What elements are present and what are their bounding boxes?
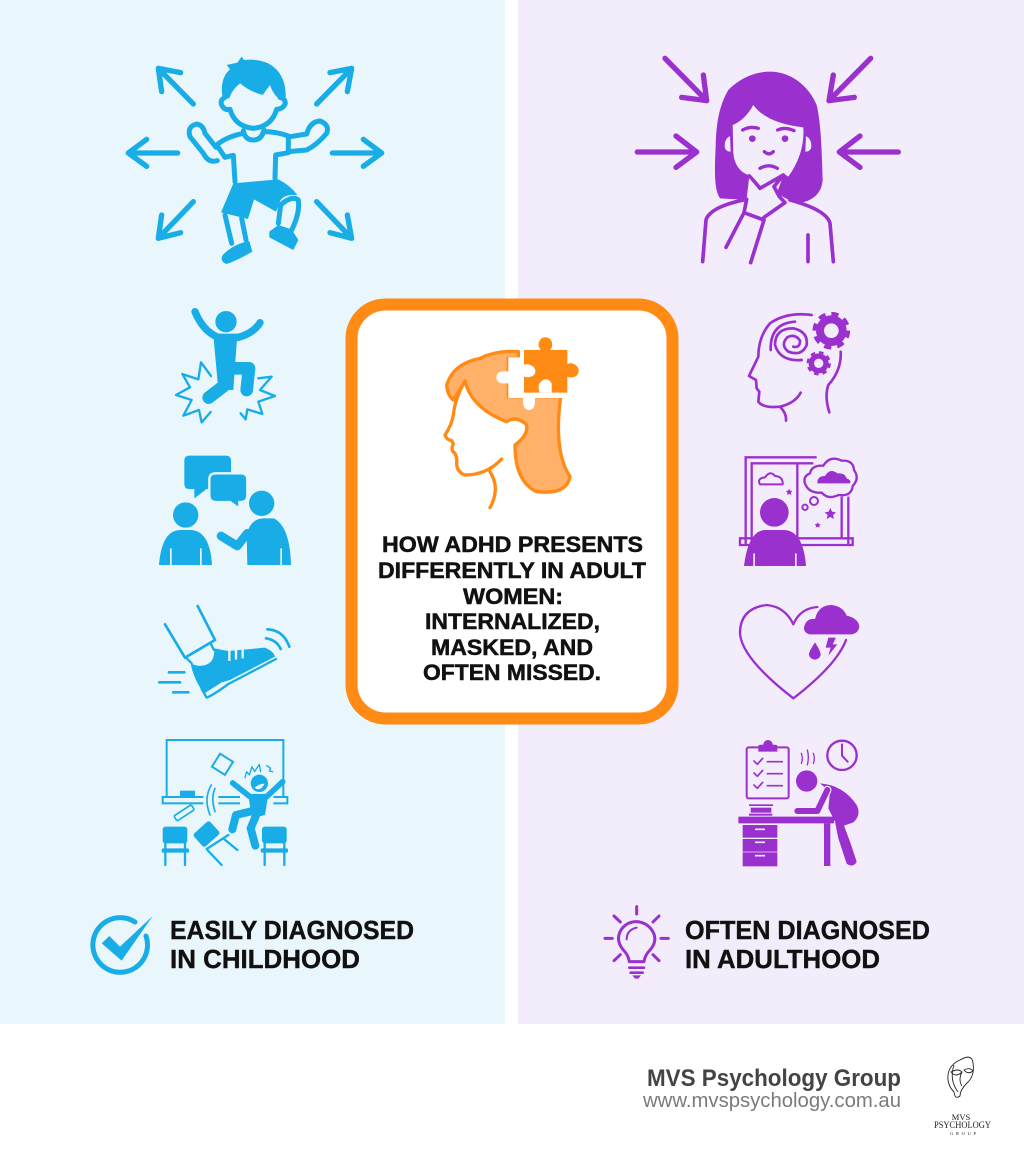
outward arrows	[128, 68, 382, 238]
left person	[159, 502, 212, 565]
person silhouette	[744, 498, 806, 566]
tipped chair	[192, 820, 237, 865]
sound waves	[203, 795, 218, 806]
woman face	[733, 105, 803, 187]
puzzle notch	[539, 379, 552, 393]
tear drop	[809, 642, 821, 660]
title text: DIFFERENTLY IN ADULT	[378, 558, 647, 583]
woman body and hand	[703, 175, 833, 263]
bulb rays	[605, 907, 668, 961]
label: easily diagnosed in childhood: IN CHILDHOOD	[170, 946, 360, 974]
left chair	[162, 827, 189, 865]
trouser leg	[165, 606, 215, 658]
flying paper	[212, 754, 233, 775]
spiral	[771, 322, 807, 360]
window frame	[740, 457, 853, 545]
stars	[786, 489, 836, 528]
icon: person daydreaming at window	[740, 457, 857, 566]
motion lines	[159, 629, 289, 692]
orange puzzle piece	[524, 337, 579, 393]
right person	[221, 491, 291, 565]
label: often diagnosed in adulthood: IN ADULTHOOD	[685, 946, 880, 974]
card frame	[352, 304, 672, 718]
check ring	[93, 918, 148, 972]
woman ears	[725, 136, 811, 152]
flying chalk	[174, 805, 194, 821]
icon: chaotic classroom	[162, 740, 288, 865]
bulb highlight	[627, 928, 637, 939]
jumper legs	[209, 367, 249, 398]
icon: lightbulb	[605, 907, 668, 979]
boy outline	[189, 97, 327, 243]
puzzle gap	[496, 357, 563, 410]
label: easily diagnosed in childhood: EASILY DIAGNOSED	[170, 917, 414, 945]
thought dots	[802, 497, 818, 510]
stress lines	[801, 750, 814, 765]
clipboard	[747, 740, 789, 798]
eraser	[180, 791, 195, 797]
icon: hyperactive boy with outward arrows	[128, 57, 382, 264]
sound wave lines	[207, 785, 215, 815]
jumper head	[215, 311, 237, 332]
large speech bubble	[184, 456, 231, 498]
bulb outline	[618, 922, 655, 962]
face profile	[445, 381, 502, 508]
lightning bolt	[826, 638, 837, 656]
inward arrows	[637, 58, 898, 167]
icon: thoughtful woman with inward arrows	[637, 58, 898, 263]
bulb base	[629, 968, 644, 973]
boy hair	[222, 57, 286, 98]
check tick	[102, 916, 153, 961]
bursts	[176, 362, 275, 422]
jumper arms	[195, 312, 260, 337]
storm cloud	[804, 605, 859, 634]
laces	[229, 648, 243, 661]
icon: head with spiral and gears	[749, 314, 848, 421]
large gear	[814, 314, 848, 348]
right chair	[261, 827, 288, 865]
jumper body	[213, 335, 237, 390]
title text: MASKED, AND	[431, 635, 593, 660]
head outline	[749, 314, 841, 421]
slumped person	[796, 770, 859, 866]
shoe sole	[202, 659, 276, 698]
heart outline	[740, 605, 846, 698]
footer: organisation name: MVS Psychology Group	[647, 1065, 901, 1092]
board tray	[163, 797, 287, 803]
logo wordmark: PSYCHOLOGY	[934, 1120, 991, 1130]
whiteboard	[167, 740, 283, 797]
icon: heart with storm cloud	[740, 605, 859, 698]
bulb tip	[632, 975, 641, 979]
panel: adulthood background	[518, 0, 1024, 1024]
boy shoes	[222, 225, 298, 264]
panicking person	[232, 764, 283, 846]
cloud inside thought	[817, 471, 850, 483]
panel: childhood background	[0, 0, 505, 1024]
logo wordmark: GROUP	[950, 1131, 976, 1136]
thought cloud	[804, 459, 857, 497]
icon: person jumping with bursts	[176, 311, 275, 422]
footer logo	[934, 1057, 995, 1136]
desk	[738, 817, 834, 866]
sock	[186, 644, 214, 663]
title text: HOW ADHD PRESENTS	[382, 532, 643, 557]
panel: central title card	[352, 304, 672, 718]
books	[749, 804, 773, 816]
title text: WOMEN:	[463, 584, 563, 609]
icon: check mark in circle	[93, 916, 153, 972]
title text: OFTEN MISSED.	[423, 660, 601, 685]
logo wordmark: MVS	[952, 1112, 970, 1122]
small cloud	[759, 473, 783, 484]
icon: exhausted person at desk	[738, 740, 859, 866]
label: often diagnosed in adulthood: OFTEN DIAGNOSED	[685, 917, 930, 945]
logo line face	[948, 1057, 973, 1097]
icon: kicking foot	[159, 606, 289, 698]
icon: head with puzzle piece	[445, 337, 579, 508]
woman facial features	[743, 127, 794, 168]
woman hair	[715, 72, 823, 203]
shoe	[191, 648, 275, 694]
boy shorts	[221, 179, 297, 219]
title text: INTERNALIZED,	[425, 609, 600, 634]
small gear	[808, 352, 830, 374]
small speech bubble	[209, 473, 247, 509]
hair	[447, 351, 570, 492]
clock	[827, 741, 857, 770]
footer: website: www.mvspsychology.com.au	[642, 1090, 901, 1112]
icon: two people talking	[159, 456, 291, 565]
